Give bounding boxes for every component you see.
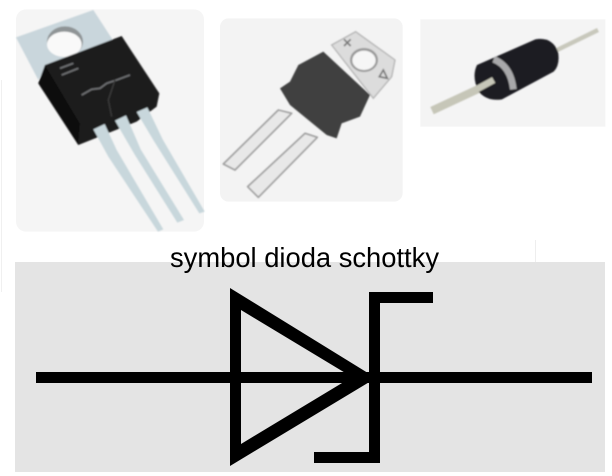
axial wire leads xyxy=(432,83,492,111)
panel: axial lead diode photo xyxy=(420,19,605,127)
metal tab with hole xyxy=(332,32,395,98)
package marking xyxy=(82,75,130,95)
two leads xyxy=(223,110,292,170)
silver cathode band xyxy=(494,59,513,89)
icon: schottky diode symbol xyxy=(36,288,592,466)
title: symbol dioda schottky xyxy=(170,242,439,273)
panel: TO-220 three-lead component photo xyxy=(16,9,205,232)
panel: grey symbol background xyxy=(15,262,605,472)
tab markings xyxy=(344,39,387,78)
triangle xyxy=(230,288,376,466)
metal tab with mounting hole xyxy=(16,10,115,80)
dark package body xyxy=(280,52,370,138)
horizontal wire xyxy=(36,372,592,383)
cylindrical black body xyxy=(475,39,559,100)
panel: two-lead TO-220 diode photo xyxy=(220,18,403,202)
cathode bar with flags xyxy=(314,292,433,463)
three leads xyxy=(93,124,163,232)
black package body xyxy=(38,36,159,145)
lead entering body xyxy=(475,80,494,90)
